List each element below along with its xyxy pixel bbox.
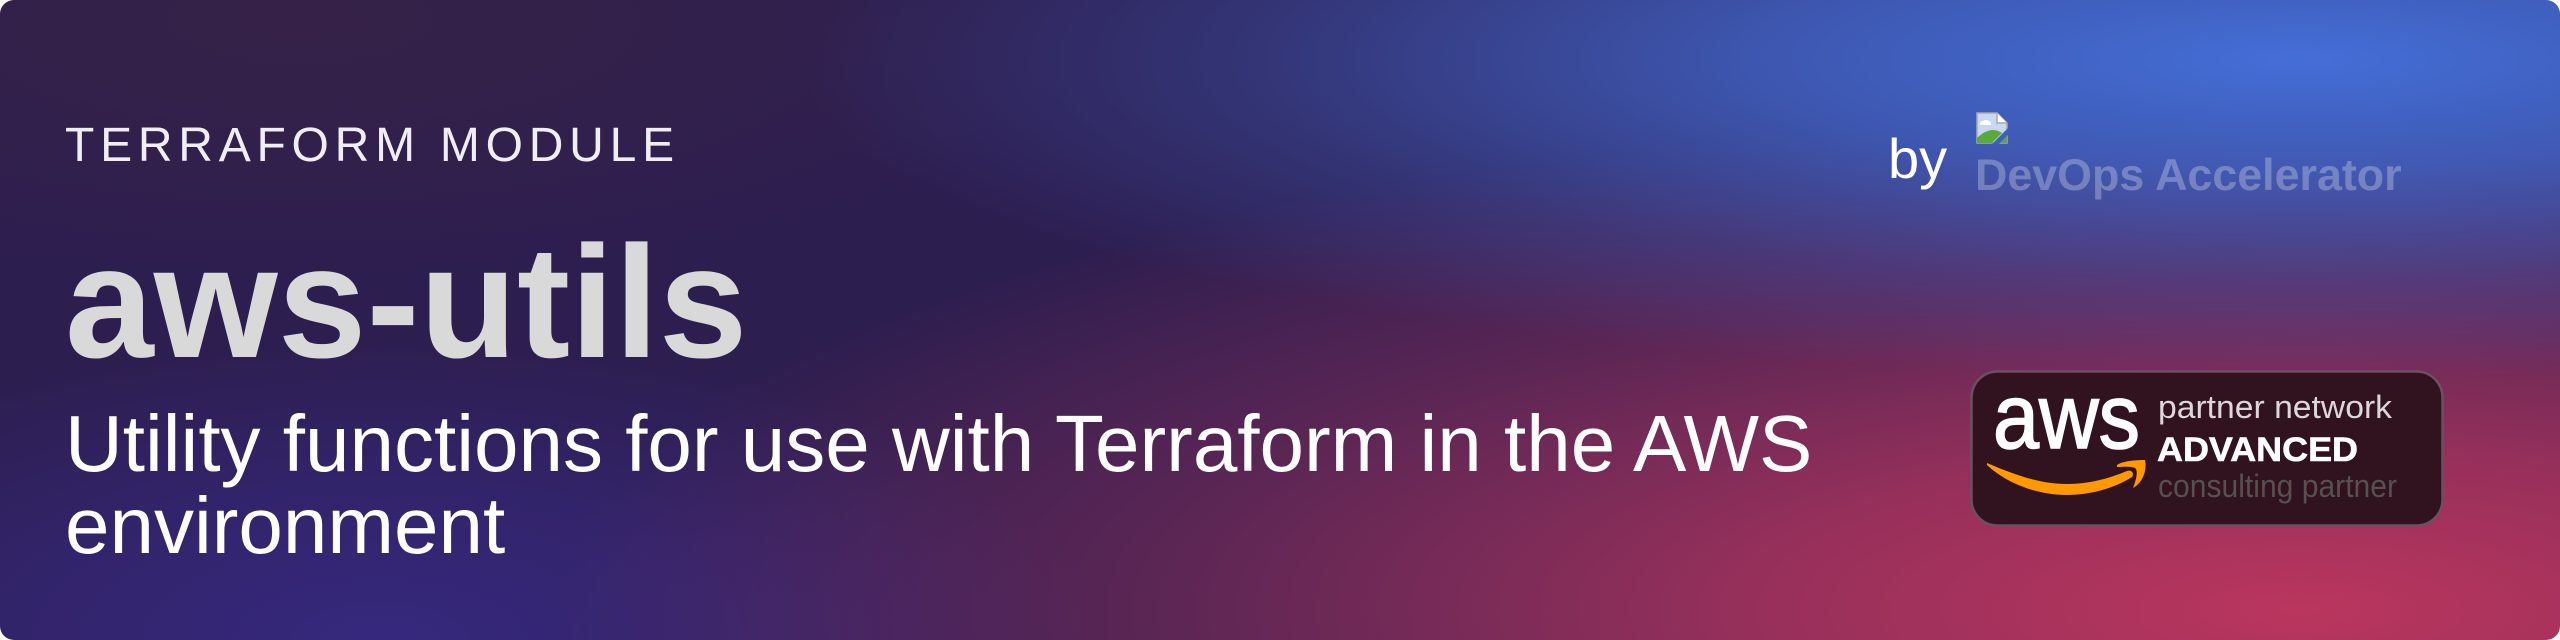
consulting partner text: consulting partner — [2158, 468, 2397, 504]
eyebrow label: TERRAFORM MODULE — [65, 119, 680, 172]
module description: environment — [65, 481, 505, 570]
by label: by — [1888, 127, 1947, 190]
module title: aws-utils — [65, 213, 747, 391]
icon: broken image placeholder — [1976, 112, 2008, 144]
icon: orange smile arrow — [1987, 460, 2146, 495]
partner network text: partner network — [2158, 389, 2393, 425]
module description — [65, 399, 1812, 570]
badge: AWS partner network — [1970, 370, 2444, 527]
module description: Utility functions for use with Terraform in the AWS — [65, 399, 1812, 488]
alt text: DevOps Accelerator: DevOps Accelerator — [1975, 150, 2402, 200]
ADVANCED text: ADVANCED — [2157, 431, 2358, 469]
